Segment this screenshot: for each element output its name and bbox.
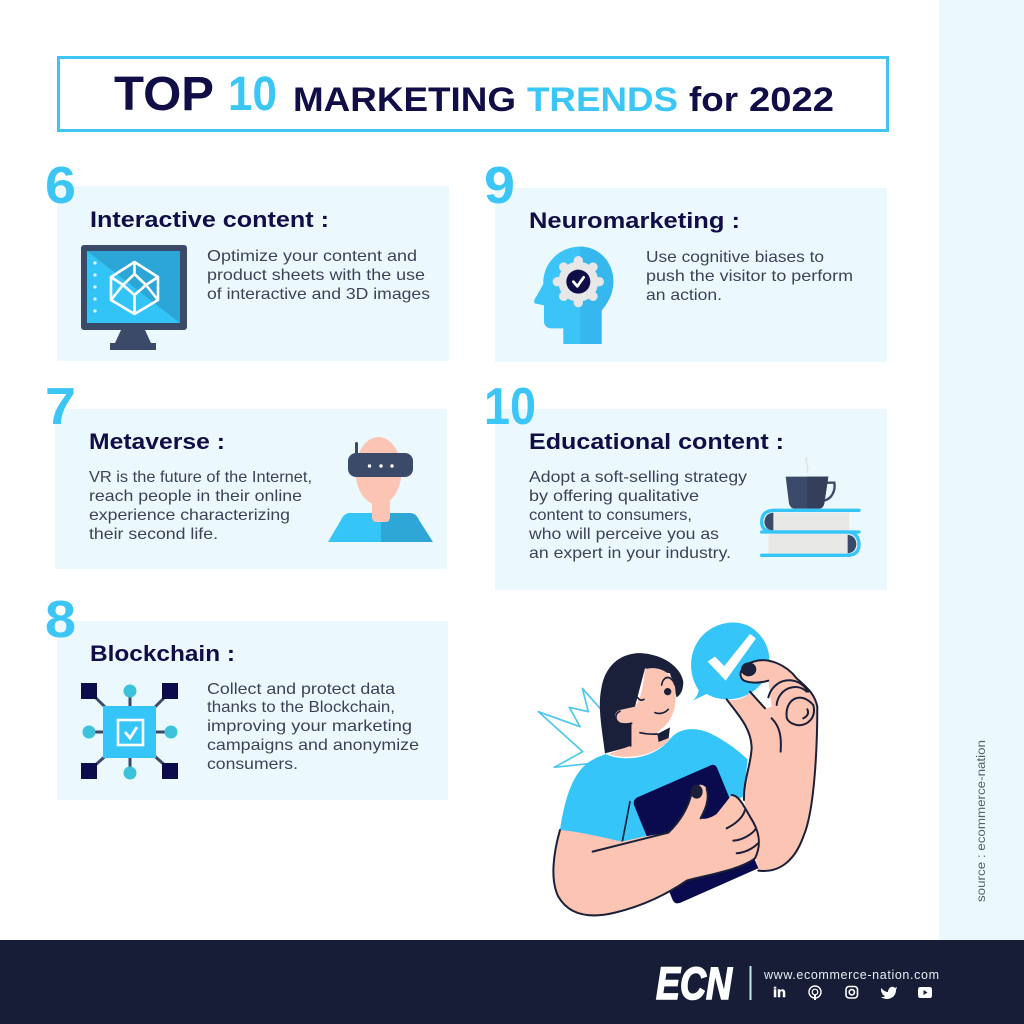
body text: improving your marketing	[207, 718, 412, 735]
body text: an action.	[646, 287, 722, 304]
shirt sleeve strap line	[622, 802, 630, 842]
social icons: in	[773, 984, 786, 1000]
body text: of interactive and 3D images	[207, 286, 430, 303]
number 6: 6	[45, 157, 76, 215]
body text: Collect and protect data	[207, 681, 395, 698]
title: TOP	[114, 68, 214, 121]
heading: Metaverse :	[89, 429, 225, 454]
source credit: source : ecommerce-nation	[976, 740, 988, 902]
title	[58, 58, 888, 130]
number 7: 7	[45, 378, 76, 436]
body text: reach people in their online	[89, 488, 302, 505]
body text: experience characterizing	[89, 507, 290, 524]
body text: Use cognitive biases to	[646, 249, 824, 266]
holding arm and hand	[553, 785, 759, 915]
website: www.ecommerce-nation.com	[763, 968, 939, 982]
heading: Blockchain :	[90, 641, 235, 666]
heading: Interactive content :	[90, 207, 329, 232]
body text: thanks to the Blockchain,	[207, 699, 395, 716]
panel: educational content	[484, 378, 887, 590]
body text: Adopt a soft-selling strategy	[529, 469, 747, 486]
body text: content to consumers,	[529, 507, 692, 524]
tablet	[634, 765, 758, 903]
body text: product sheets with the use	[207, 267, 425, 284]
speech bubble with check	[691, 623, 769, 701]
illustration: woman holding tablet with check bubble	[538, 623, 817, 915]
right side strip	[939, 0, 1024, 940]
panel: interactive content	[45, 157, 449, 361]
number 10: 10	[484, 378, 536, 436]
body text	[646, 249, 853, 304]
body text: push the visitor to perform	[646, 268, 853, 285]
footer bar	[0, 940, 1024, 1024]
heading: Educational content :	[529, 429, 784, 454]
logo: ECN: ECN	[656, 958, 733, 1009]
title: 10	[228, 68, 277, 121]
heading: Neuromarketing :	[529, 208, 740, 233]
body text: who will perceive you as	[528, 526, 719, 543]
panel: blockchain	[45, 591, 448, 800]
title: MARKETING	[293, 81, 516, 119]
title: for	[689, 81, 738, 119]
body text: Optimize your content and	[207, 248, 417, 265]
body text: by offering qualitative	[529, 488, 699, 505]
face and neck	[608, 668, 676, 757]
body text: consumers.	[207, 756, 298, 773]
body text	[89, 469, 312, 543]
title: 2022	[749, 81, 834, 119]
large raised hand	[727, 660, 817, 871]
shirt	[560, 729, 748, 842]
icon: person with VR headset	[328, 437, 433, 542]
title: TRENDS	[527, 81, 678, 119]
icon: monitor with 3D cube	[81, 245, 187, 350]
body text: an expert in your industry.	[529, 545, 731, 562]
body text	[207, 248, 430, 303]
icon: blockchain network	[81, 683, 178, 780]
panel: metaverse	[45, 378, 447, 569]
hair	[600, 653, 683, 753]
body text: their second life.	[89, 526, 218, 543]
number 8: 8	[45, 591, 76, 649]
icon: head with gear	[534, 247, 613, 344]
body text	[528, 469, 747, 562]
social icons	[773, 984, 932, 1000]
body text: VR is the future of the Internet,	[89, 469, 312, 486]
body text: campaigns and anonymize	[207, 737, 419, 754]
panel: neuromarketing	[484, 157, 887, 362]
divider	[750, 966, 752, 1000]
body text	[207, 681, 419, 773]
spark burst	[538, 688, 600, 767]
icon: coffee cup on books	[762, 457, 859, 555]
number 9: 9	[484, 157, 515, 215]
